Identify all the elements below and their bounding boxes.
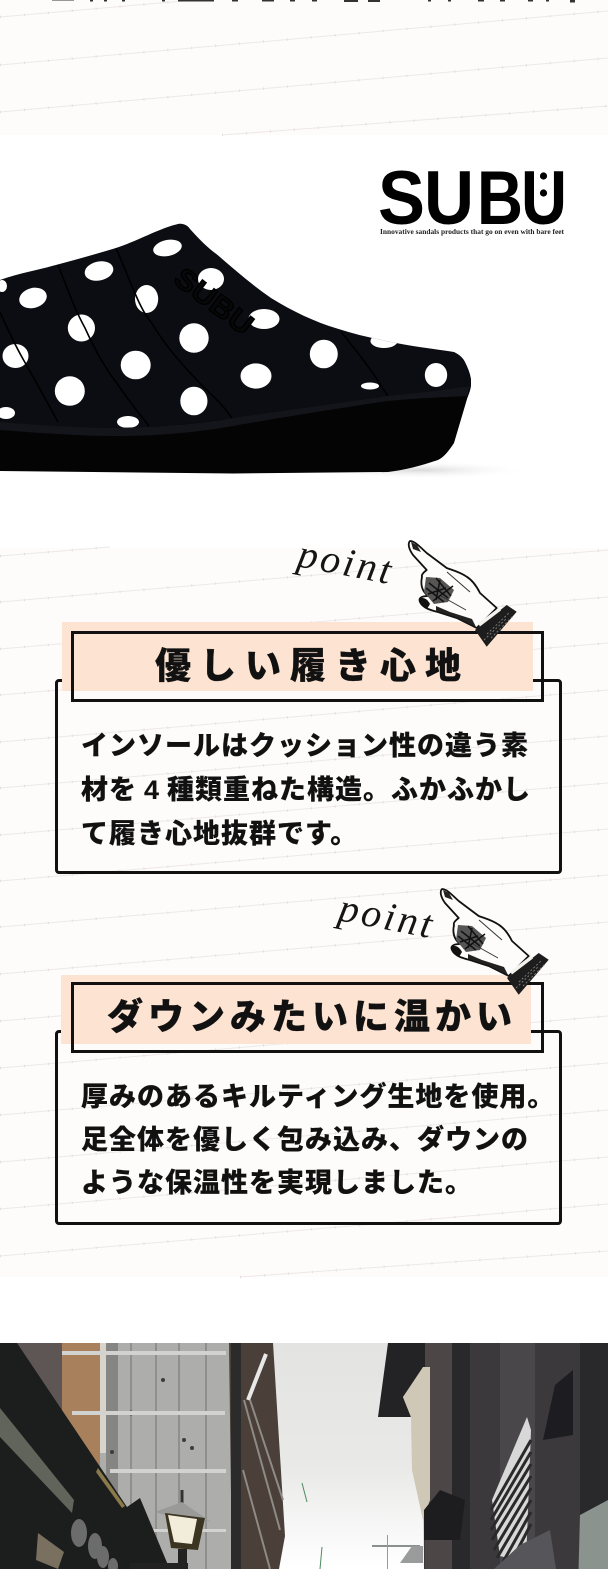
cut-off heading sliver at top bbox=[52, 0, 575, 2]
body text: インソールはクッション性の違う素 bbox=[81, 731, 529, 761]
point script 2: point bbox=[332, 884, 437, 947]
logo: SUBU: U bbox=[424, 156, 474, 241]
antenna bbox=[372, 1545, 420, 1547]
dark shape on building bbox=[424, 1490, 465, 1540]
quilting seams bbox=[0, 248, 388, 426]
icon: pointing hand 2 bbox=[441, 889, 549, 995]
body text: て履き心地抜群です。 bbox=[81, 819, 358, 849]
photo: old Japanese street bbox=[0, 1343, 608, 1569]
beige panel bbox=[403, 1367, 430, 1520]
dark roof bbox=[0, 1343, 186, 1569]
eave bbox=[378, 1343, 425, 1417]
panel frame bbox=[55, 679, 562, 874]
icon: pointing hand 1 bbox=[409, 541, 517, 647]
body text: 足全体を優しく包み込み、ダウンの bbox=[81, 1125, 529, 1155]
heading: warm like down: ダウンみたいに温かい bbox=[107, 996, 517, 1037]
logo: SUBU: U bbox=[521, 156, 567, 241]
panel frame bbox=[55, 1030, 562, 1225]
logo: SUBU: Innovative sandals products that go on even with bare feet bbox=[380, 229, 565, 236]
title highlight bbox=[61, 975, 531, 1044]
right ornament bbox=[578, 1500, 608, 1569]
title highlight bbox=[62, 622, 533, 691]
lantern bbox=[130, 1490, 211, 1569]
heading: soft comfort: 優しい履き心地 bbox=[155, 645, 470, 686]
body text bbox=[81, 731, 531, 849]
sky bbox=[270, 1343, 440, 1569]
panel: warm like down bbox=[55, 975, 562, 1225]
title box bbox=[71, 631, 544, 702]
wooden wall bbox=[62, 1343, 232, 1569]
title box bbox=[71, 982, 544, 1053]
embroidered logo on slipper: SUBU bbox=[168, 262, 259, 342]
body text bbox=[81, 1082, 555, 1198]
upper bbox=[0, 224, 471, 428]
dark wooden side wall bbox=[229, 1343, 285, 1569]
brick wall bbox=[15, 1343, 62, 1414]
logo: SUBU: S bbox=[378, 156, 425, 241]
body text: 厚みのあるキルティング生地を使用。 bbox=[81, 1082, 555, 1112]
body text: 材を 4 種類重ねた構造。ふかふかし bbox=[81, 775, 531, 805]
sole bbox=[0, 380, 471, 474]
roof edge bbox=[0, 1408, 74, 1513]
sole welt band bbox=[0, 386, 470, 436]
green wires bbox=[302, 1483, 322, 1569]
roof tiles bbox=[71, 1519, 118, 1569]
point script 1: point bbox=[291, 530, 396, 593]
panel: soft comfort bbox=[55, 622, 562, 874]
product photo: polka-dot quilted slipper bbox=[0, 156, 567, 475]
polka dots bbox=[0, 237, 447, 428]
icon: soft shadow under sole bbox=[310, 461, 530, 479]
logo: SUBU bbox=[378, 156, 567, 241]
logo: SUBU: B bbox=[477, 156, 523, 241]
louvre stripes bbox=[492, 1417, 531, 1563]
right building bbox=[423, 1343, 608, 1569]
body text: ような保温性を実現しました。 bbox=[81, 1168, 473, 1198]
